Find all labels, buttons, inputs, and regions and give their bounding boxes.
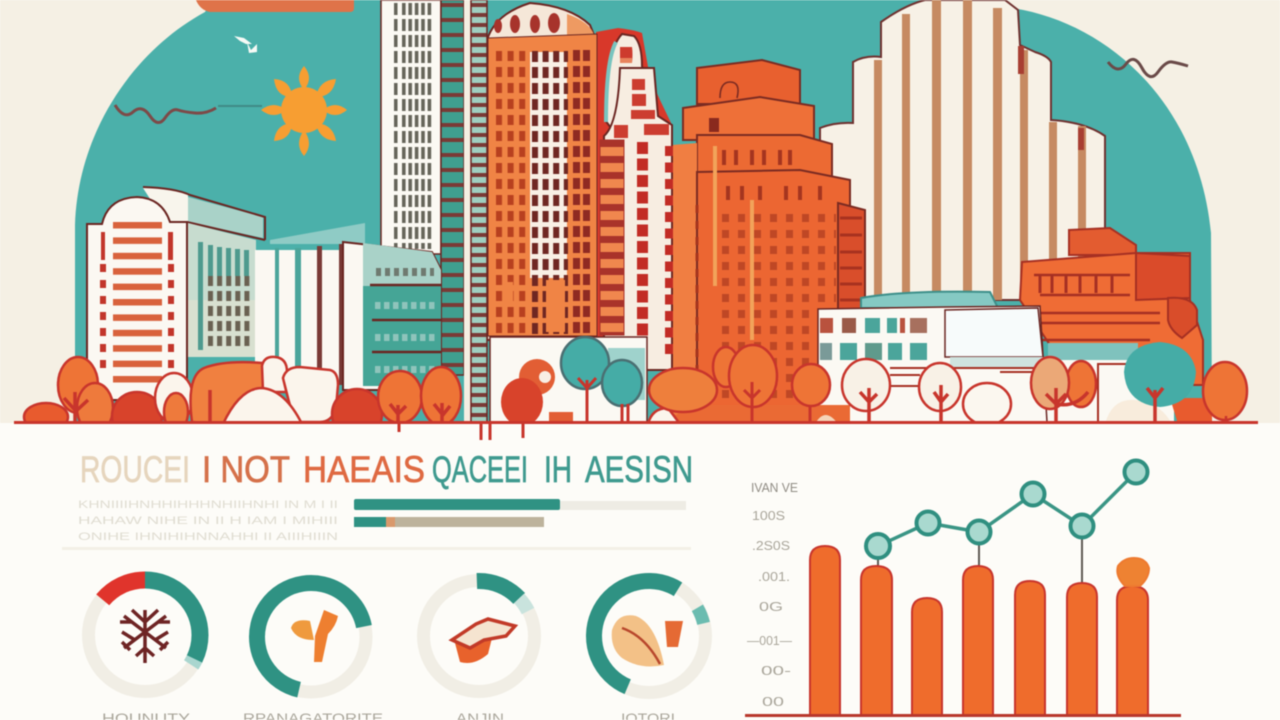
chart: y axis labels: —001—	[747, 633, 792, 648]
title: AESISN	[585, 449, 693, 490]
trees: right group	[648, 342, 1247, 425]
chart: y axis labels: 0G	[759, 599, 783, 614]
chart: bars	[810, 546, 1149, 715]
donut 4	[573, 560, 725, 712]
cream stepped tower	[820, 0, 1105, 304]
title	[80, 449, 693, 490]
right red low building	[1020, 228, 1203, 385]
background: upper cream	[0, 0, 1280, 424]
squiggle cloud right	[1108, 59, 1188, 77]
body text lines: KHNIIIIHNHHIHHHNHIIHNHI IN M I II	[78, 499, 338, 511]
title: ROUCEI	[80, 449, 190, 490]
title: HAEAIS	[303, 449, 425, 490]
divider	[62, 547, 691, 550]
middle white and teal building	[255, 223, 441, 390]
chart: y axis labels: 100S	[752, 508, 785, 523]
teal sky arch	[75, 0, 1212, 424]
sun	[261, 66, 347, 156]
body text lines: HAHAW NIHE IN II H IAM I MIHIII	[78, 515, 338, 527]
red and white spire tower	[596, 28, 673, 370]
birds: white	[234, 36, 257, 53]
low white building with teal windows	[490, 292, 1174, 422]
body text lines: ONIHE IHNIHIHNNAHHI II AIIIHIIIN	[78, 531, 338, 543]
trees: left group	[24, 357, 573, 440]
red brick stepped tower	[672, 60, 865, 422]
title: IH	[544, 449, 572, 490]
donut 2	[246, 572, 376, 702]
chart: y axis labels	[747, 480, 798, 709]
title: QACEEI	[432, 449, 528, 490]
icon: donut 1 snowflake	[120, 610, 170, 663]
tall white tower	[381, 0, 441, 254]
chart: y axis labels: .001.	[758, 569, 790, 584]
progress bars	[354, 499, 686, 527]
icon: donut 2 orange shape	[291, 610, 338, 662]
body text lines	[78, 499, 338, 543]
teal ladder columns	[441, 0, 487, 422]
icon: donut 4 orange shape	[612, 615, 683, 666]
trees: teal pair	[561, 337, 642, 424]
icon: donut 3 orange shape	[452, 619, 515, 663]
ground line	[14, 421, 1258, 424]
trunk stubs below ground	[399, 424, 523, 440]
donut 1	[68, 558, 222, 712]
title: I NOT	[202, 449, 290, 490]
chart: stems	[878, 535, 1082, 584]
background: lower paper	[0, 423, 1280, 720]
left building with round top	[87, 187, 265, 400]
squiggle cloud left	[115, 105, 262, 123]
chart: line series	[866, 460, 1148, 558]
chart: y axis labels: .2S0S	[752, 538, 790, 553]
donut labels	[102, 710, 675, 720]
top orange banner	[196, 0, 354, 12]
chart: baseline	[745, 714, 1181, 717]
donut 3	[401, 558, 557, 714]
chart: y axis labels: 00	[762, 694, 784, 709]
orange window tower	[487, 3, 597, 340]
chart: y axis labels: 00-	[761, 663, 791, 678]
chart: y axis labels: IVAN VE	[751, 480, 798, 495]
